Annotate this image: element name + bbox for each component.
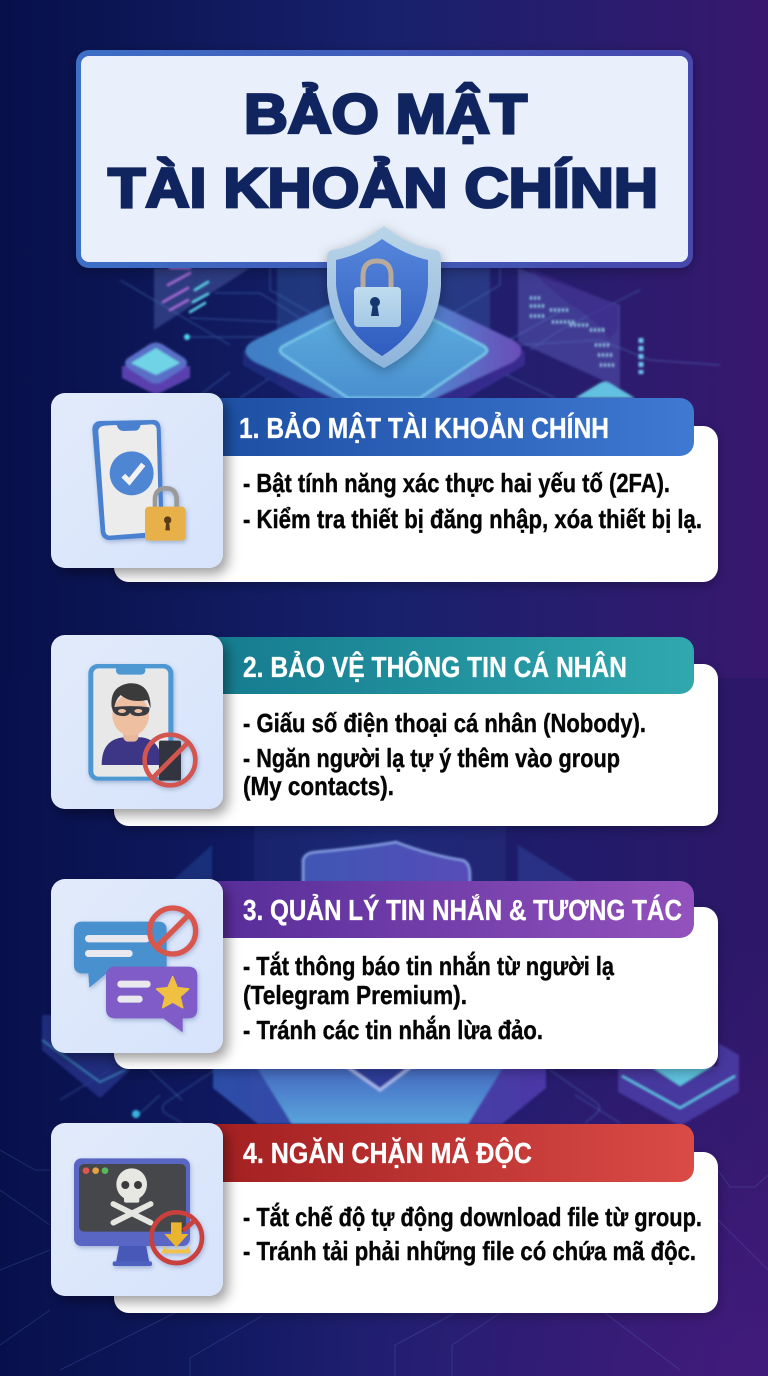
card 1 header: 1. BẢO MẬT TÀI KHOẢN CHÍNH — [239, 412, 609, 445]
panel: card 4 — [51, 1123, 718, 1313]
card 2 icon tile — [51, 635, 223, 809]
background: lower right stack — [618, 1043, 739, 1126]
background: small platform right — [575, 382, 635, 398]
card 2 text panel — [114, 664, 718, 826]
card 3 body text — [243, 951, 614, 1045]
card 4 icon tile — [51, 1123, 223, 1296]
card 3 text panel — [114, 907, 718, 1069]
icon: shield with padlock — [327, 226, 441, 368]
card 1 text panel — [114, 426, 718, 582]
card 1 body text: - Kiểm tra thiết bị đăng nhập, xóa thiết bị lạ. — [243, 504, 702, 534]
card 1 header — [200, 398, 694, 456]
card 4 body text: - Tránh tải phải những file có chứa mã độc. — [243, 1236, 696, 1266]
card 2 header — [200, 637, 694, 694]
card 3 body text: (Telegram Premium). — [243, 980, 467, 1010]
panel: card 3 — [51, 879, 718, 1069]
card 2 header: 2. BẢO VỆ THÔNG TIN CÁ NHÂN — [243, 651, 627, 684]
background: central platform — [243, 285, 525, 425]
card 4 body text — [243, 1202, 702, 1266]
card 2 body text: - Ngăn người lạ tự ý thêm vào group — [243, 743, 620, 773]
icon: chat bubbles with block sign and star — [74, 908, 197, 1032]
background: code panel left — [154, 268, 250, 330]
icon: masked person on phone with blocked phone — [88, 664, 195, 785]
card 4 header: 4. NGĂN CHẶN MÃ ĐỘC — [243, 1137, 532, 1170]
background: ghost column — [254, 826, 506, 886]
background: ghost shield — [303, 842, 470, 890]
background: glowing node — [184, 334, 190, 340]
card 4 header — [200, 1124, 694, 1182]
card 3 body text: - Tránh các tin nhắn lừa đảo. — [243, 1015, 543, 1045]
icon: monitor with skull and blocked download — [74, 1158, 202, 1266]
card 1 body text: - Bật tính năng xác thực hai yếu tố (2FA). — [243, 468, 670, 498]
background: node — [132, 1110, 140, 1118]
card 1 icon tile — [51, 393, 223, 568]
background: light column — [277, 268, 490, 350]
background illustration: lower platform — [42, 826, 739, 1126]
panel: card 1 — [51, 393, 718, 582]
card 2 body text: (My contacts). — [243, 771, 394, 801]
card 3 icon tile — [51, 879, 223, 1053]
card 2 body text — [243, 708, 646, 801]
background: ghost panel right — [518, 845, 590, 890]
background: ghost panel left — [162, 845, 212, 890]
background: data panel right — [518, 268, 641, 388]
background: lower central platform — [213, 1066, 546, 1124]
card 1 body text — [243, 468, 702, 534]
card 3 header — [200, 881, 694, 938]
background: small platform left — [122, 342, 190, 395]
card 3 header: 3. QUẢN LÝ TIN NHẮN & TƯƠNG TÁC — [243, 894, 682, 927]
icon: phone with check and padlock — [92, 420, 186, 541]
card 4 text panel — [114, 1152, 718, 1313]
title line 2: TÀI KHOẢN CHÍNH — [108, 156, 658, 219]
card 3 body text: - Tắt thông báo tin nhắn từ người lạ — [243, 951, 614, 981]
background: lower left stack — [42, 1015, 130, 1098]
title line 1: BẢO MẬT — [244, 82, 527, 145]
title panel — [76, 50, 693, 268]
background illustration: upper platform — [120, 268, 720, 425]
panel: card 2 — [51, 635, 718, 826]
card 2 body text: - Giấu số điện thoại cá nhân (Nobody). — [243, 708, 646, 738]
background: faint circuit lines — [0, 1150, 768, 1376]
